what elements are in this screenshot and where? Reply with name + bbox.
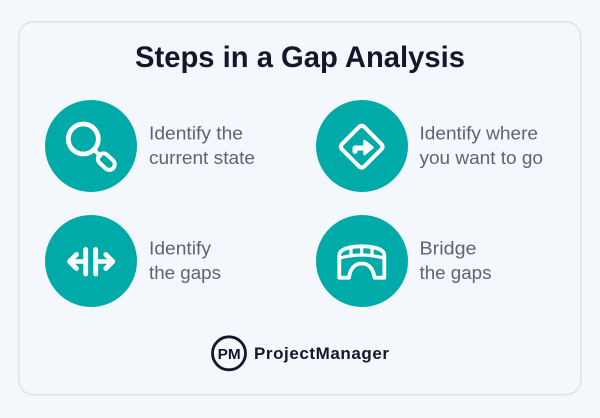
step 2: identify where you want to go xyxy=(316,100,543,192)
logo mark xyxy=(212,337,246,370)
text: bridge the gaps: the gaps xyxy=(420,263,492,283)
title: Steps in a Gap Analysis xyxy=(135,41,465,74)
logo: ProjectManager xyxy=(212,337,389,370)
icon: magnifying glass xyxy=(45,100,137,192)
text: identify the current state: current state xyxy=(149,148,255,168)
icon: road sign xyxy=(316,100,408,192)
logo mark: PM xyxy=(218,346,241,363)
step 1: identify the current state xyxy=(45,100,255,192)
text: identify the gaps: Identify xyxy=(149,238,211,258)
text: bridge the gaps: Bridge xyxy=(420,238,476,258)
icon: gap arrows xyxy=(45,215,137,307)
text: identify where you want to go: you want to go xyxy=(420,148,543,168)
step 4: bridge the gaps xyxy=(316,215,492,307)
icon: bridge xyxy=(316,215,408,307)
text: identify the gaps: the gaps xyxy=(149,263,221,283)
text: identify where you want to go: Identify where xyxy=(420,124,538,144)
text: identify the current state: Identify the xyxy=(149,124,243,144)
logo wordmark: ProjectManager xyxy=(254,344,389,363)
step 3: identify the gaps xyxy=(45,215,221,307)
